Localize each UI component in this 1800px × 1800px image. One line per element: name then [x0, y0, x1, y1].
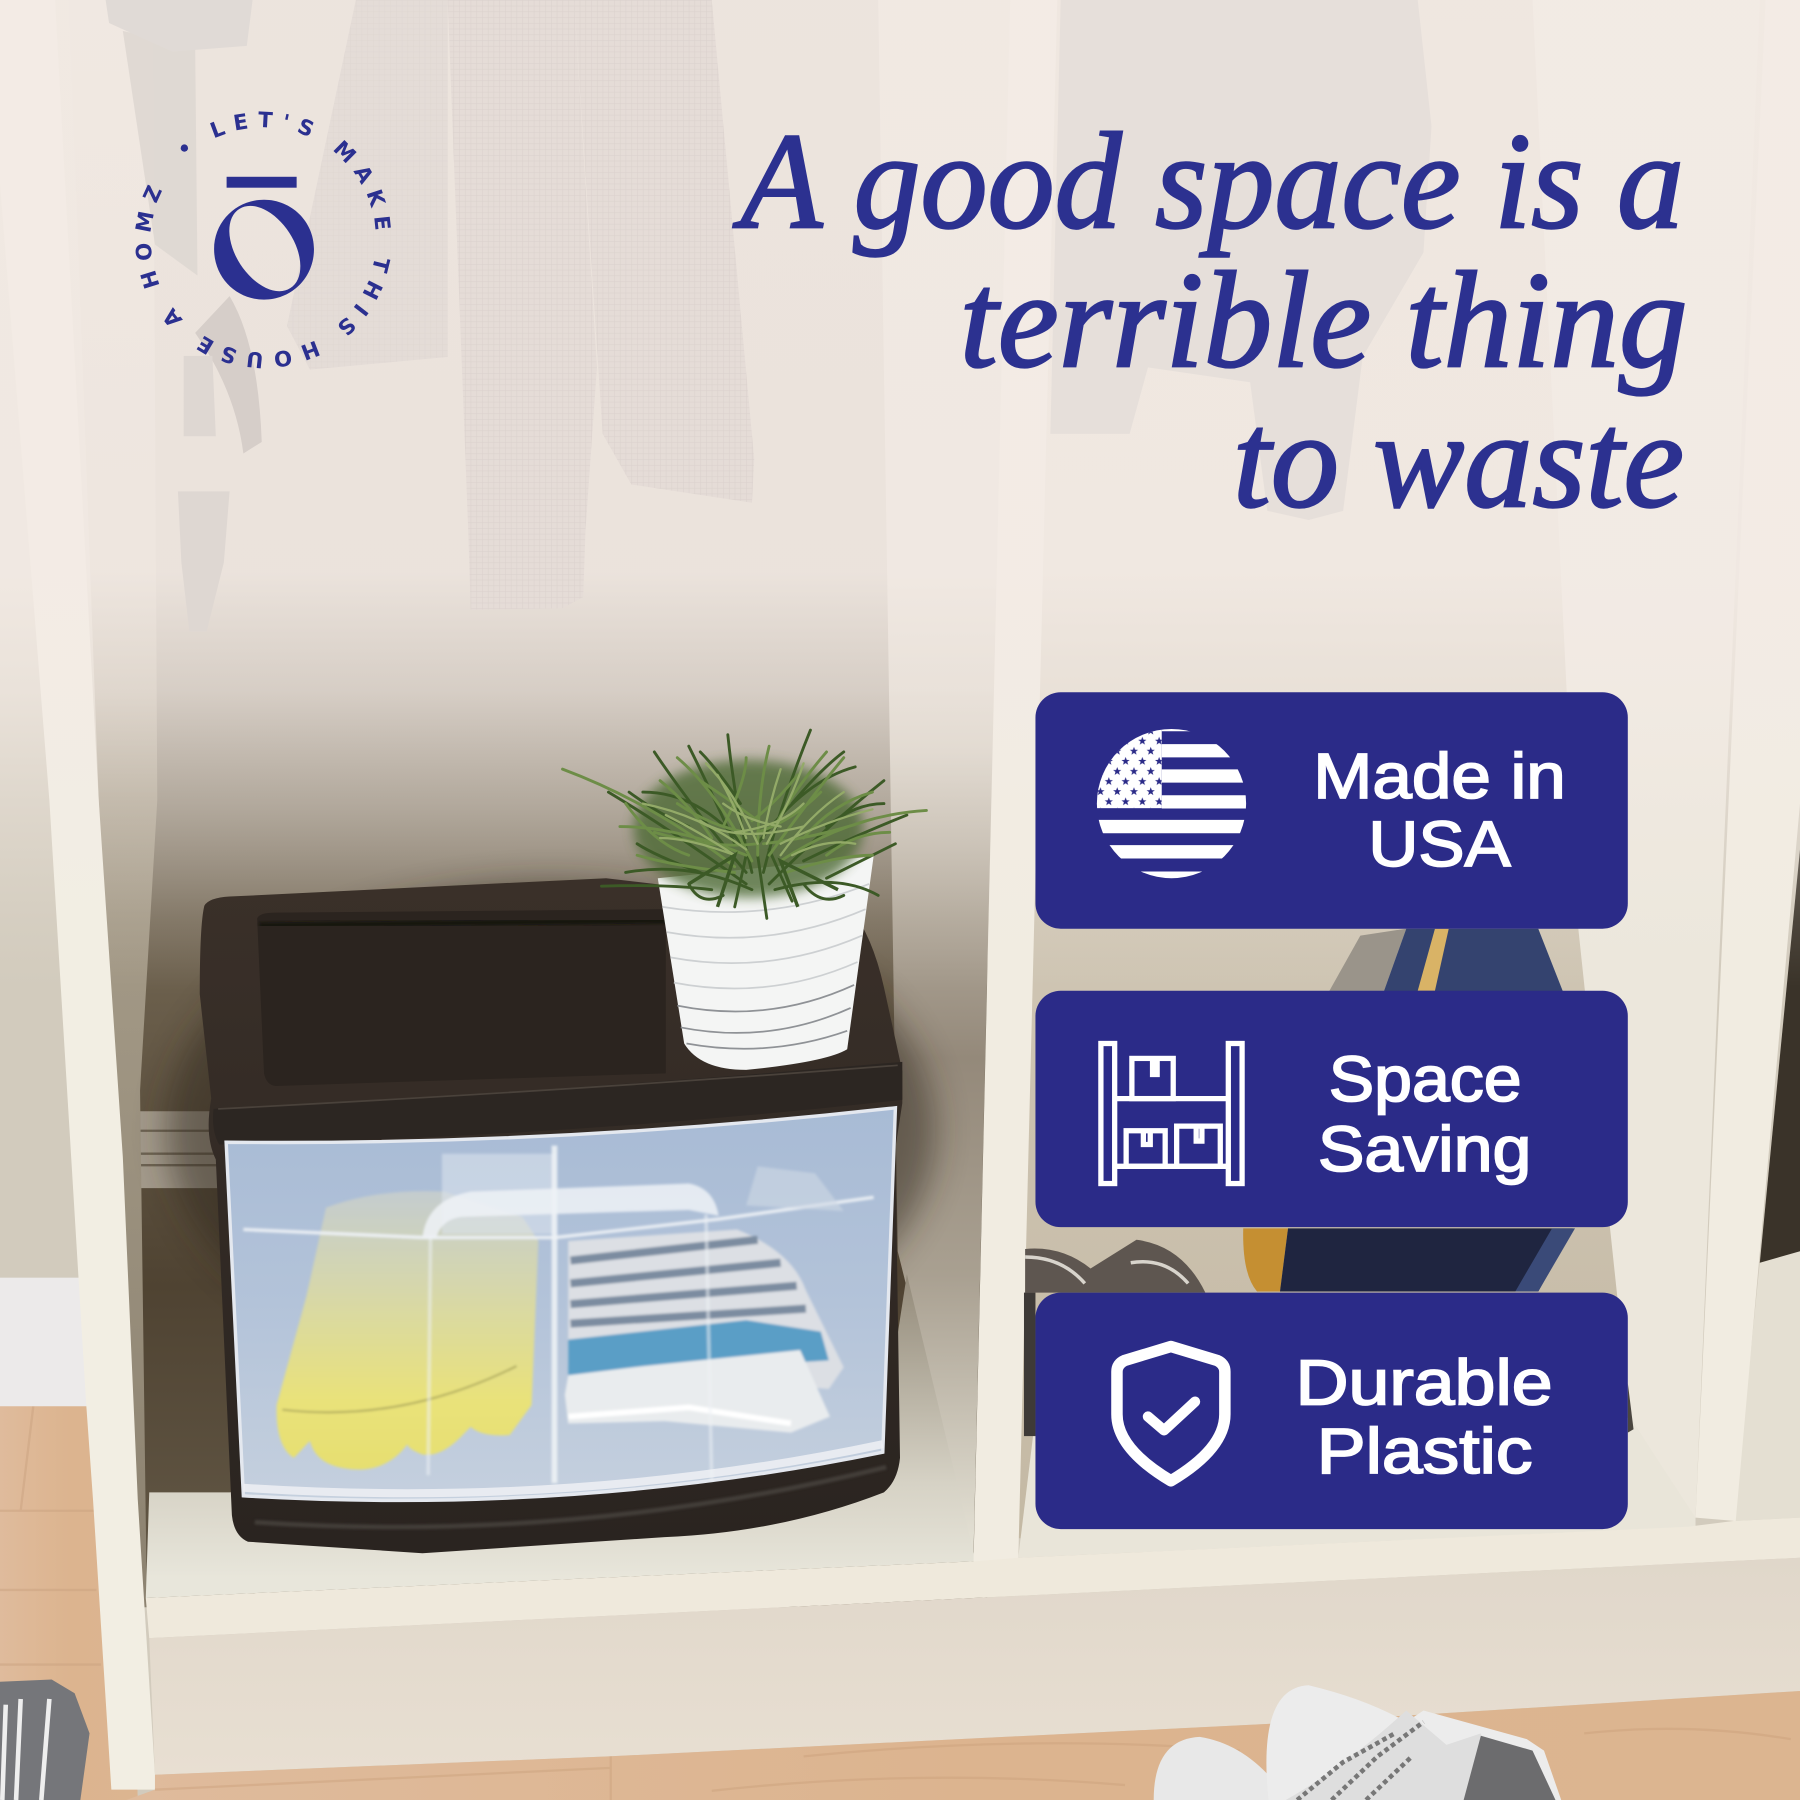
mid leaves — [562, 746, 926, 872]
pot — [658, 856, 874, 1070]
far right cubby — [1733, 849, 1800, 1521]
yellow blanket — [277, 1191, 538, 1469]
drawer contents — [243, 1146, 874, 1483]
baseboard — [0, 1278, 92, 1406]
icon: shelf with boxes — [1101, 1043, 1242, 1184]
headline: to waste — [1233, 383, 1684, 536]
shelf front band — [146, 1518, 1800, 1638]
right compartment floor — [1018, 1418, 1696, 1558]
lid recess — [257, 909, 666, 1086]
drawer front — [226, 1108, 895, 1500]
headline — [733, 104, 1688, 536]
white towel — [565, 1350, 830, 1433]
left compartment back wall — [98, 0, 987, 1607]
card: Made in USA: USA — [1368, 808, 1511, 880]
right hanging coat — [1050, 0, 1432, 520]
potted plant — [562, 730, 926, 1070]
translucent center divider and handle — [442, 1154, 556, 1234]
kick panel — [149, 1558, 1800, 1775]
left compartment floor — [146, 1274, 976, 1598]
logo letter O — [214, 200, 314, 300]
bottom floor — [126, 1691, 1800, 1800]
blue folded towel — [568, 1320, 829, 1383]
card: Durable Plastic: Plastic — [1317, 1415, 1533, 1487]
rim band — [213, 1062, 902, 1145]
card: Made in USA — [1035, 692, 1628, 929]
right compartment back wall — [1010, 0, 1653, 1538]
light leaves — [643, 763, 872, 855]
card: Durable Plastic — [1035, 1293, 1628, 1529]
backpack and shoes in right compartment — [1024, 929, 1634, 1436]
faded overlay — [0, 0, 1800, 987]
lid and body — [200, 878, 902, 1553]
circular text: LET'S MAKE THIS HOUSE A HOMZ — [135, 111, 391, 368]
white sneakers — [1154, 1685, 1561, 1800]
knit coat — [287, 0, 448, 370]
right divider front — [1696, 0, 1800, 1521]
strap and keys — [123, 31, 197, 276]
headline: A good space is a — [733, 104, 1684, 257]
separator dot — [181, 144, 188, 152]
rug — [0, 1679, 90, 1800]
logo badge — [135, 111, 391, 368]
icon: american flag globe — [1096, 726, 1247, 878]
dark leaves — [602, 730, 907, 918]
base shine — [255, 1467, 886, 1527]
icon: shield with check — [1117, 1347, 1225, 1481]
center divider front — [973, 0, 1057, 1564]
back wall skirting — [140, 1111, 235, 1188]
striped pillow — [568, 1229, 844, 1389]
left compartment right inner wall — [878, 0, 1010, 1555]
label: Space — [1329, 1043, 1522, 1115]
faded hanging clothes — [106, 0, 1432, 631]
logo macron — [227, 177, 297, 188]
left compartment inner wall — [69, 0, 157, 1607]
left side panel front — [0, 0, 155, 1790]
label: Durable — [1295, 1347, 1553, 1419]
plant shadow mass — [634, 760, 863, 898]
left floor — [0, 1405, 138, 1800]
right compartment right inner wall — [1533, 0, 1760, 1518]
label: Made in — [1313, 740, 1566, 812]
soft shadow — [166, 884, 936, 1378]
headline: terrible thing — [960, 243, 1687, 396]
storage drawer unit — [166, 878, 936, 1553]
card: Space Saving — [1035, 991, 1628, 1227]
card: Space Saving: Saving — [1318, 1113, 1531, 1185]
